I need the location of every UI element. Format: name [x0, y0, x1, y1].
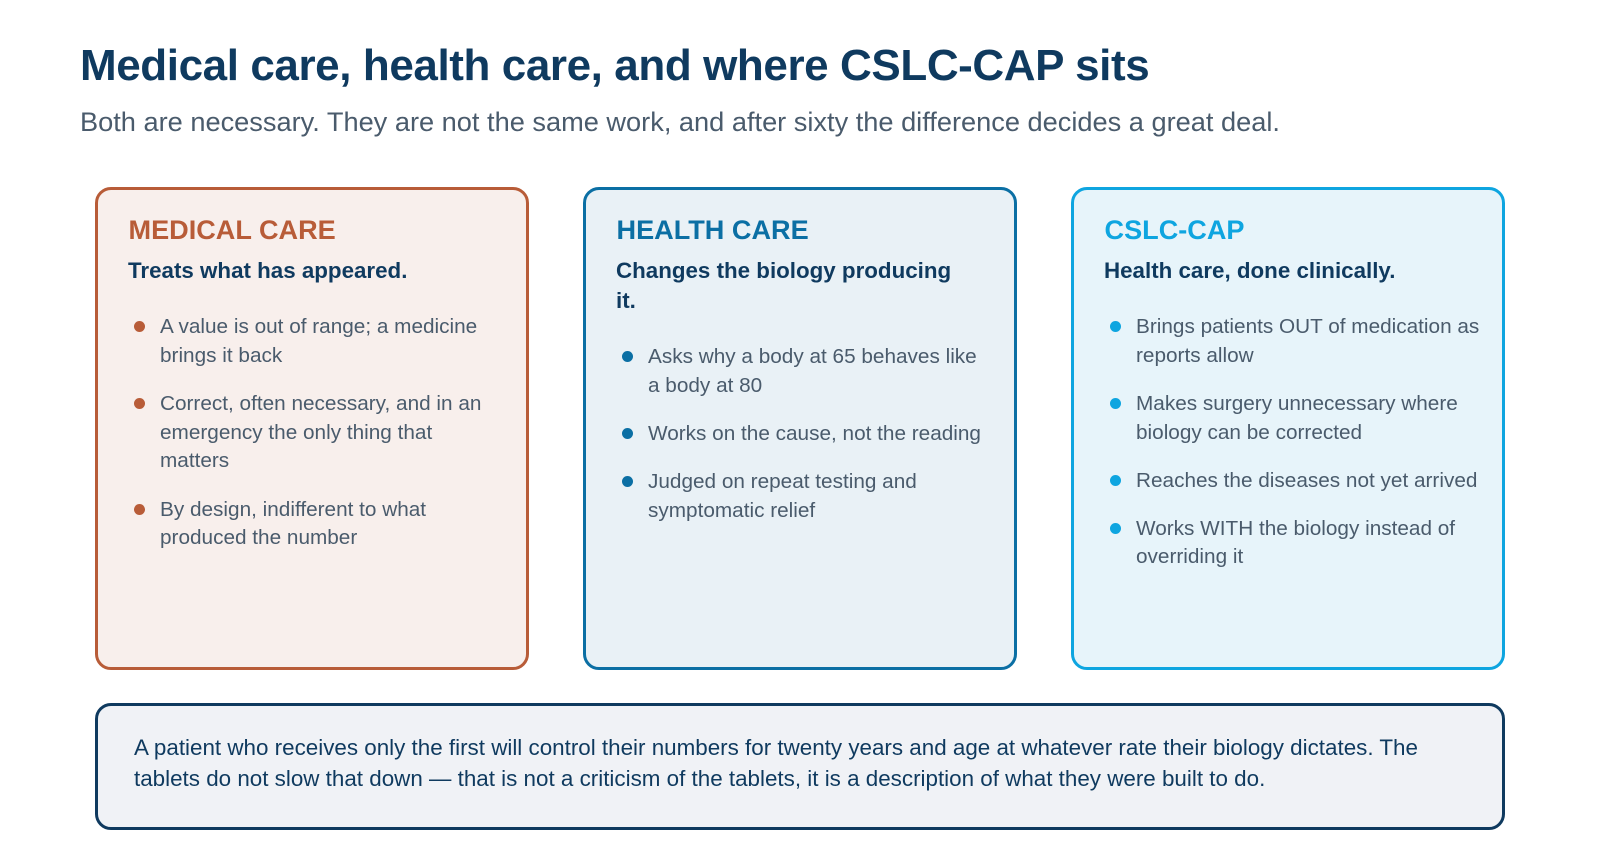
bullet: asks why: [622, 345, 977, 397]
bullet: out of medication: reports allow: [1136, 344, 1254, 367]
bullet: surgery unnecessary: Makes surgery unnecessary where: [1136, 392, 1458, 415]
bullet: diseases not yet arrived: Reaches the diseases not yet arrived: [1136, 469, 1477, 492]
bullet: judged on testing: [622, 470, 917, 522]
callout text: tablets do not slow that down — that is not a criticism of the tablets, it is a description of what they were built to do.: [134, 766, 1265, 791]
bullet: works on the cause: Works on the cause, not the reading: [648, 422, 981, 445]
heading: CSLC-CAP: CSLC-CAP: [1104, 214, 1244, 245]
bullet: out of medication: [1110, 315, 1479, 367]
bullet: value out of range: brings it back: [160, 344, 282, 367]
callout text: [134, 735, 1418, 791]
panel: medical care: [95, 187, 529, 670]
bullet: surgery unnecessary: biology can be corrected: [1136, 421, 1362, 444]
bullet: works with biology: [1110, 516, 1456, 568]
bullet: asks why: a body at 80: [648, 374, 762, 397]
bullet: correct and necessary: [134, 392, 481, 472]
bullet: asks why: Asks why a body at 65 behaves like: [648, 345, 977, 368]
bullet: works with biology: Works WITH the biology instead of: [1136, 516, 1455, 540]
heading: medical care: MEDICAL CARE: [128, 214, 336, 245]
bullet: indifferent by design: [134, 498, 426, 549]
bullet: indifferent by design: By design, indifferent to what: [160, 498, 426, 520]
bullet: judged on testing: symptomatic relief: [648, 499, 815, 522]
heading: health care: HEALTH CARE: [616, 214, 809, 245]
bullet: correct and necessary: emergency the only thing that: [160, 421, 432, 444]
bullet: indifferent by design: produced the number: [160, 526, 357, 549]
bullet: value out of range: [134, 315, 477, 367]
panel: health care: [583, 187, 1017, 670]
tagline: health care: it.: [616, 288, 636, 313]
tagline: medical care: Treats what has appeared.: [128, 258, 407, 283]
bullet: out of medication: Brings patients OUT of medication as: [1136, 315, 1479, 338]
callout text: A patient who receives only the first will control their numbers for twenty years and age at whatever rate their biology dictates. The: [134, 735, 1418, 760]
callout: [95, 703, 1505, 830]
panel: CSLC-CAP: [1071, 187, 1505, 670]
tagline: health care: [616, 258, 951, 313]
title: Medical care, health care, and where CSLC-CAP sits: [80, 41, 1149, 90]
bullet: value out of range: A value is out of range; a medicine: [160, 315, 477, 338]
tagline: health care: Changes the biology producing: [616, 258, 951, 283]
bullet: surgery unnecessary: [1110, 392, 1458, 444]
subtitle: Both are necessary. They are not the same work, and after sixty the difference decides a great deal.: [80, 106, 1280, 137]
tagline: CSLC-CAP: Health care, done clinically.: [1104, 258, 1395, 283]
bullet: works with biology: overriding it: [1136, 545, 1243, 568]
bullet: correct and necessary: Correct, often necessary, and in an: [160, 392, 481, 415]
bullet: correct and necessary: matters: [160, 449, 229, 472]
bullet: judged on testing: Judged on repeat testing and: [648, 470, 917, 493]
